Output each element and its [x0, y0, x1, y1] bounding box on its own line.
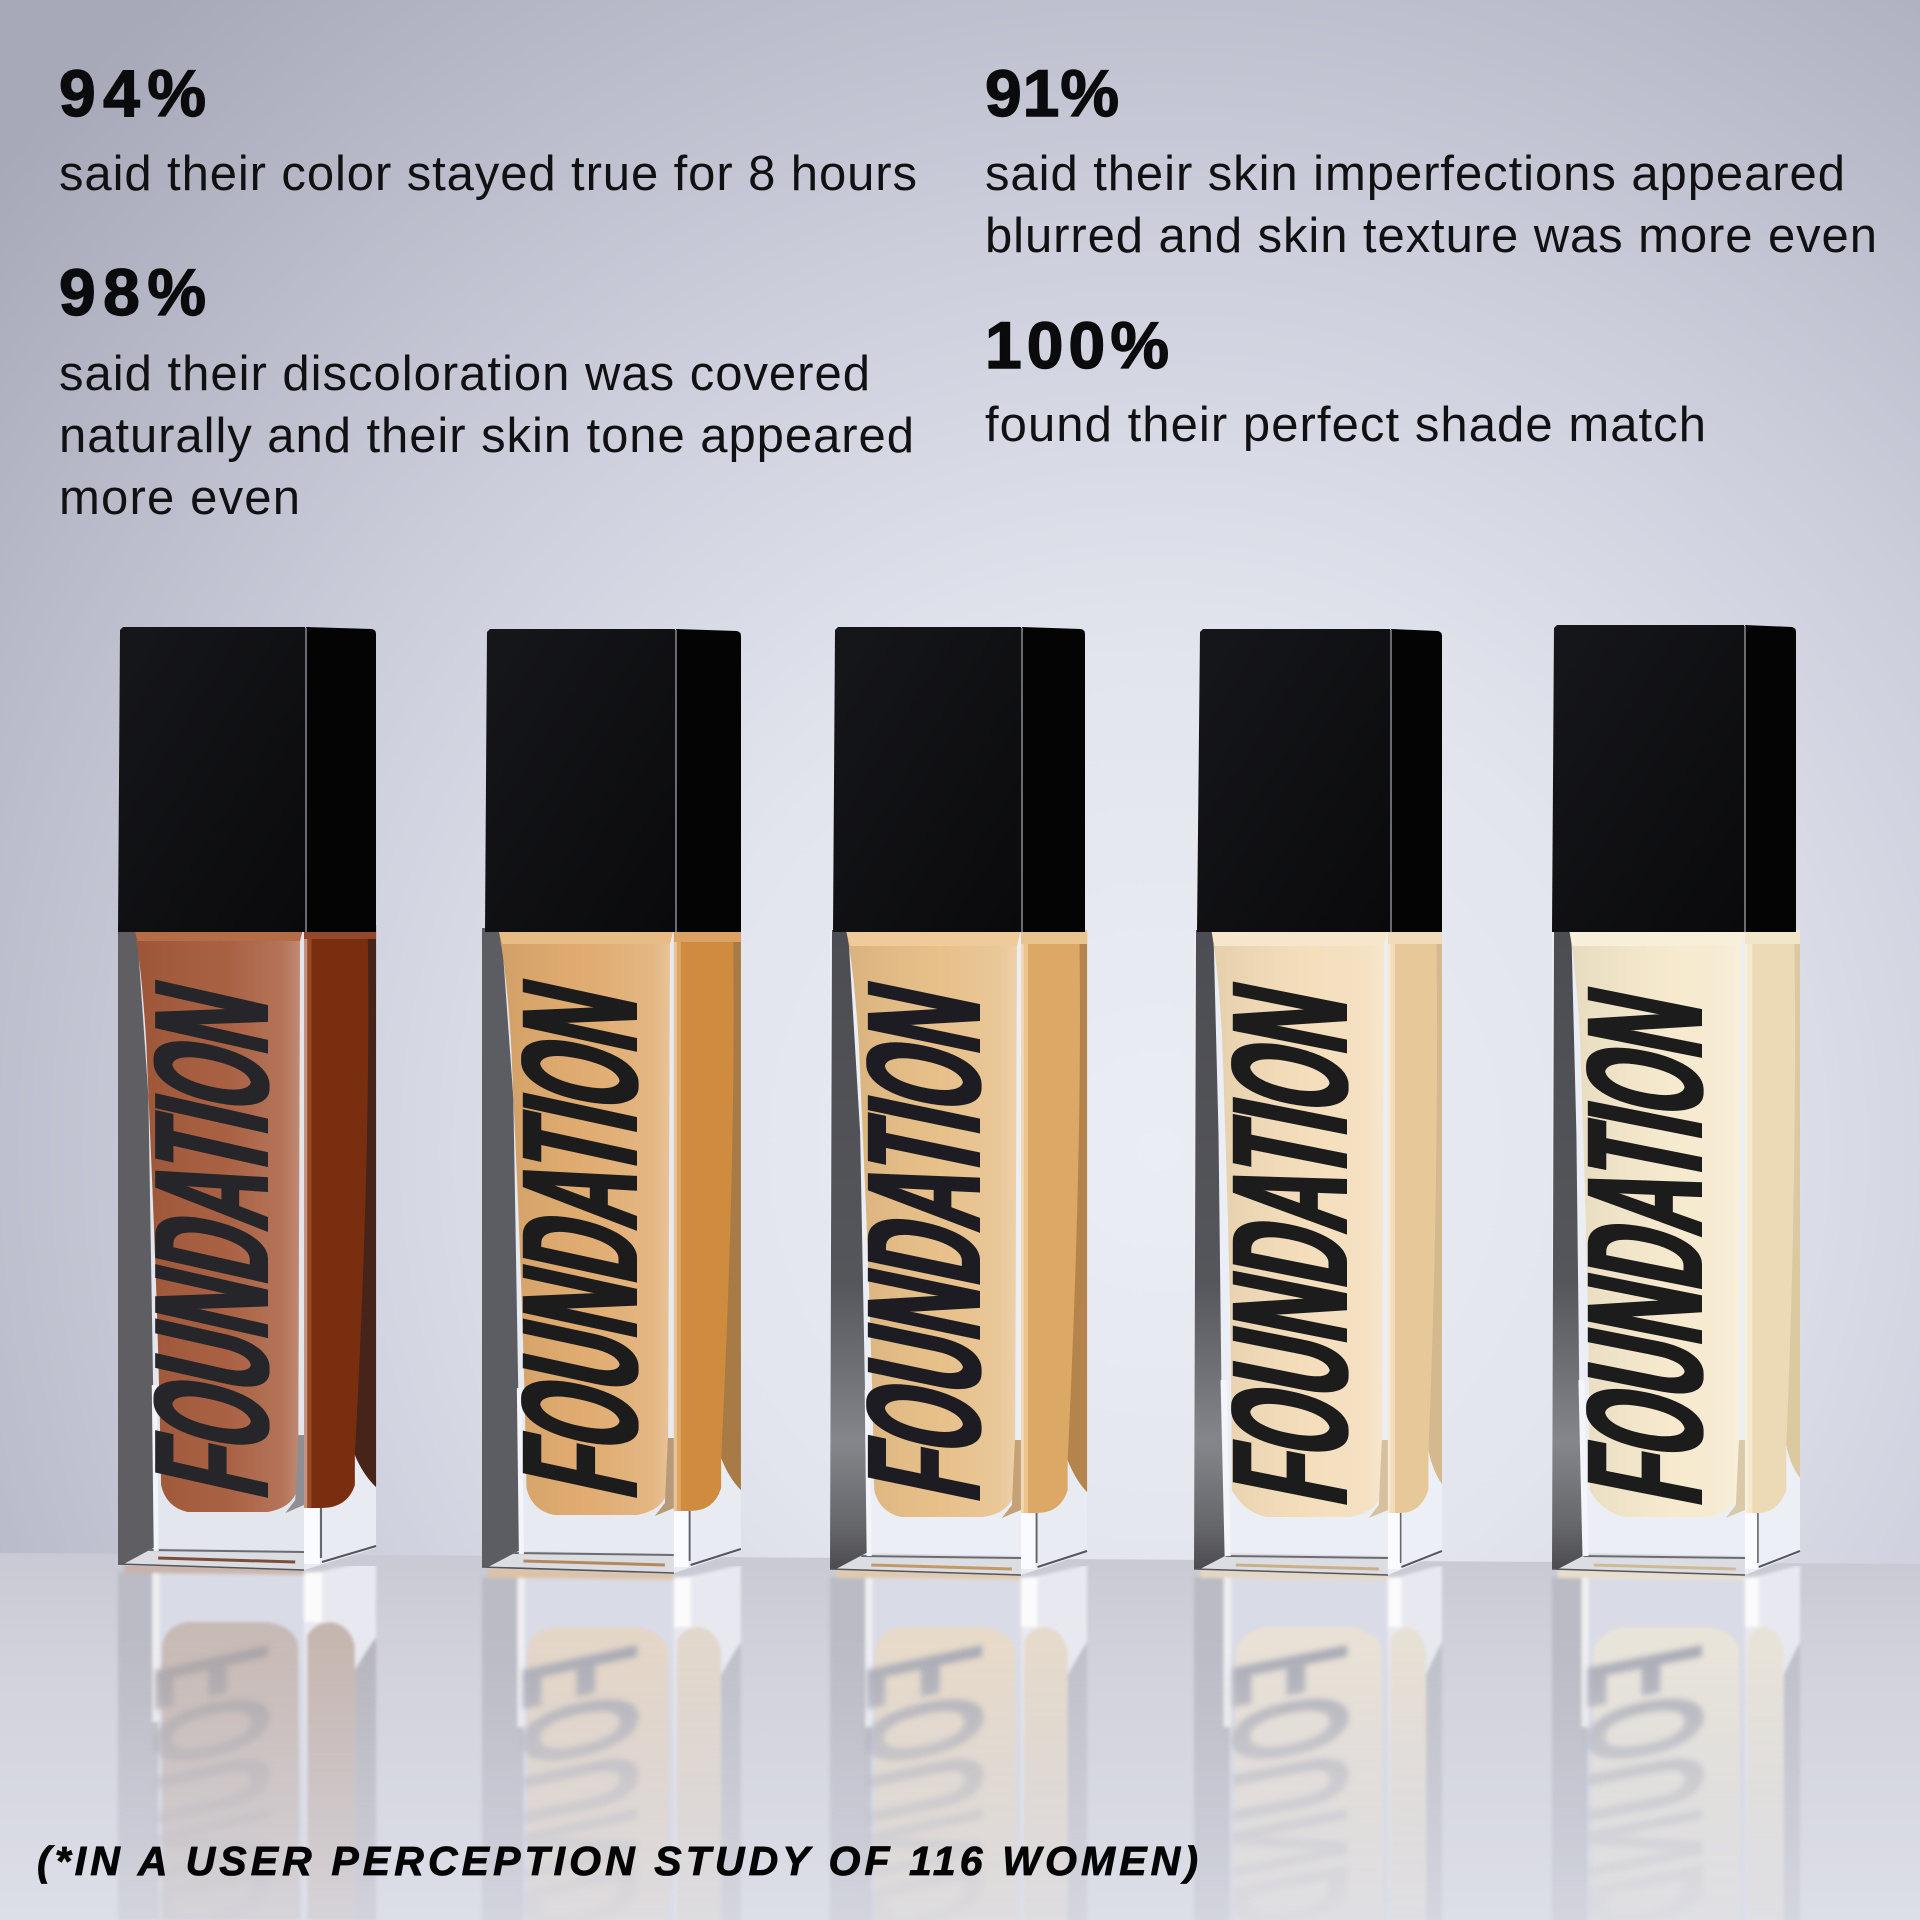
- bottle 4 front face: [1194, 930, 1388, 1575]
- stat: 100%: 100%: [985, 308, 1169, 382]
- bottle 3 front face: [830, 930, 1021, 1575]
- stat: 98%: said their discoloration was covered: [59, 347, 870, 401]
- bottle 1 side face: [304, 925, 376, 1570]
- reflection: bottle 4: [1194, 1565, 1442, 1920]
- bottle 5 front face: [1552, 930, 1745, 1575]
- stat: 98%: [59, 255, 914, 525]
- bottle 3 cap: [833, 627, 1085, 932]
- reflection: bottle 2: [482, 1565, 741, 1920]
- reflective table surface: [0, 1553, 1920, 1920]
- bottle 4 FOUNDATION label: FOUNDATION: [1198, 971, 1383, 1515]
- bottle 2 FOUNDATION label: FOUNDATION: [487, 967, 673, 1509]
- bottle 5: fair shade: [1552, 625, 1800, 1575]
- bottle 3 side face: [1021, 930, 1087, 1575]
- stat: 91%: blurred and skin texture was more even: [985, 209, 1877, 263]
- stat: 91%: [985, 56, 1877, 263]
- reflections of bottles: [118, 1560, 1800, 1920]
- bottle 4 side face: [1388, 930, 1442, 1575]
- stat: 98%: 98%: [59, 255, 206, 329]
- stat: 94%: said their color stayed true for 8 hours: [59, 147, 917, 201]
- footnote: (*IN A USER PERCEPTION STUDY OF 116 WOMEN): [37, 1838, 1198, 1884]
- reflection: bottle 3: [830, 1565, 1087, 1920]
- bottle 1 cap: [118, 627, 376, 932]
- stat: 100%: found their perfect shade match: [985, 398, 1706, 452]
- bottle 5 side face: [1745, 930, 1800, 1575]
- bottle 1 FOUNDATION label: FOUNDATION: [121, 969, 304, 1509]
- bottle 1: deep shade: [118, 627, 376, 1570]
- bottle 2 side face: [674, 928, 741, 1573]
- stat: 98%: naturally and their skin tone appeared: [59, 409, 914, 463]
- stat: 100%: [985, 308, 1706, 452]
- bottle 2: tan shade: [482, 629, 741, 1573]
- bottle 2 cap: [485, 629, 741, 932]
- stat: 94%: [59, 56, 917, 201]
- bottle 3 FOUNDATION label: FOUNDATION: [834, 971, 1016, 1511]
- reflection: bottle 5: [1552, 1565, 1800, 1920]
- stat: 94%: 94%: [59, 56, 206, 130]
- stat: 91%: said their skin imperfections appeared: [985, 147, 1845, 201]
- bottle 2 front face: [482, 928, 674, 1573]
- bottle 4: light beige shade: [1194, 629, 1442, 1575]
- bottle 5 cap: [1552, 625, 1796, 932]
- bottle 3: golden shade: [830, 627, 1087, 1575]
- stat: 98%: more even: [59, 471, 300, 525]
- reflection: bottle 1: [118, 1560, 376, 1920]
- bottle 4 cap: [1197, 629, 1442, 932]
- bottle 5 FOUNDATION label: FOUNDATION: [1553, 976, 1738, 1515]
- stat: 91%: 91%: [985, 56, 1119, 130]
- bottle 1 front face: [118, 925, 304, 1570]
